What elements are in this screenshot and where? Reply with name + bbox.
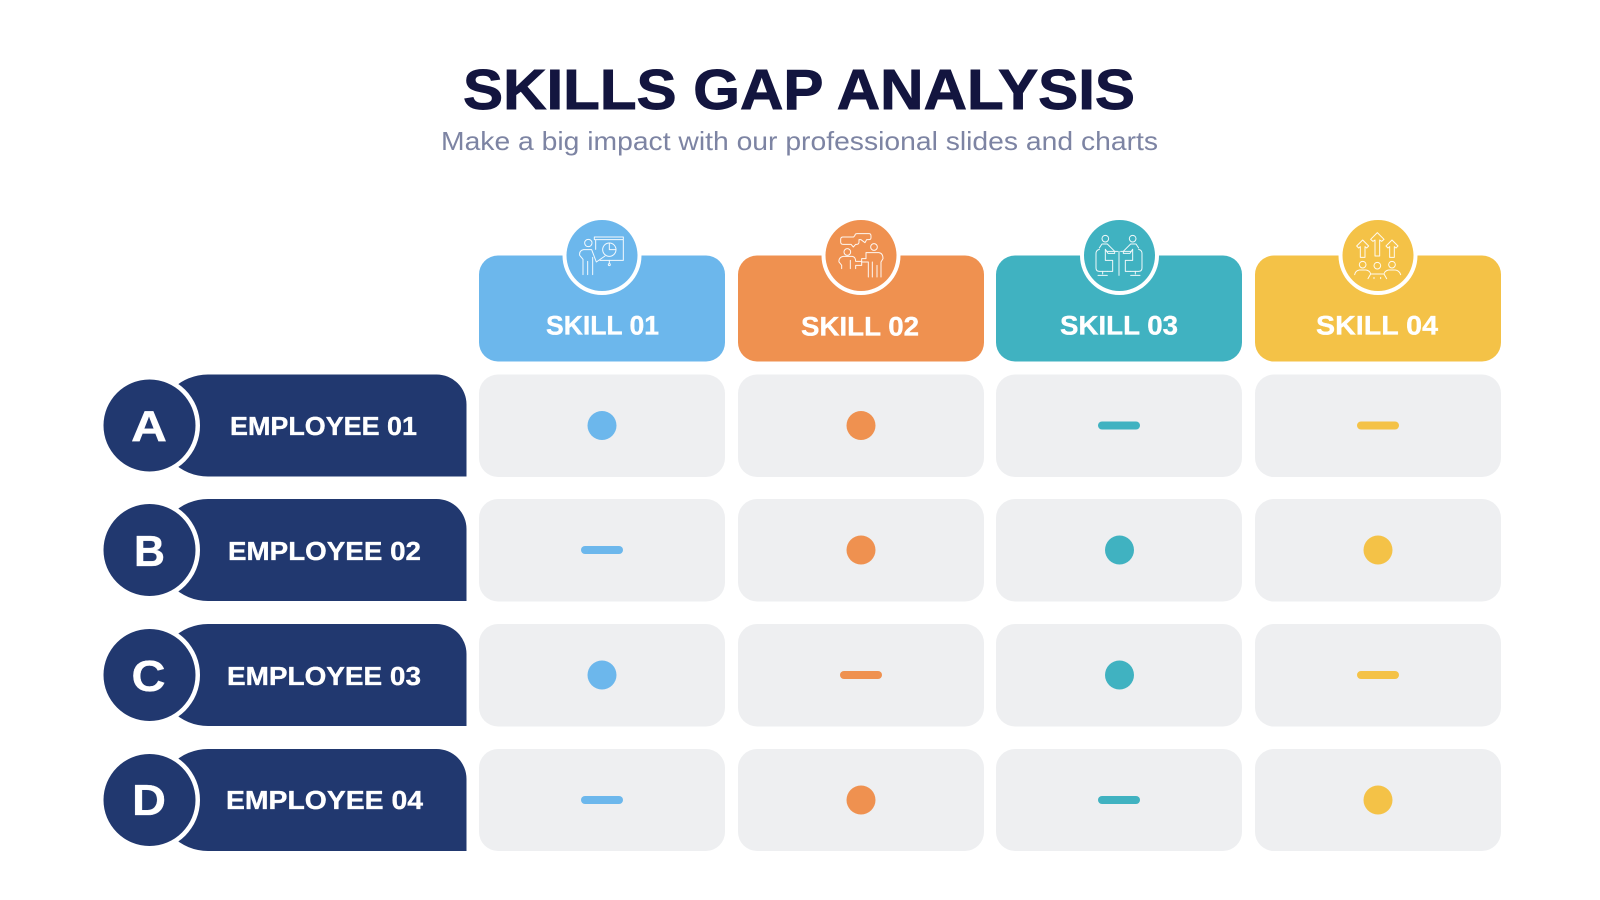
matrix row: Employee 02: [479, 499, 1501, 602]
label: Skill 01: SKILL 01: [546, 310, 659, 340]
row label: Employee 02: [99, 499, 466, 601]
row label: Employee 04: [99, 749, 466, 851]
label: Employee 03: EMPLOYEE 03: [227, 661, 421, 691]
row label: Employee 03: [99, 624, 466, 726]
label: Employee 02: EMPLOYEE 02: [228, 536, 421, 566]
label: Skill 04: SKILL 04: [1316, 310, 1438, 340]
letter D: D: [132, 776, 166, 825]
icon: presenter with pie chart board: [580, 237, 623, 275]
skill header: Skill 02: [738, 216, 984, 362]
subtitle: Make a big impact with our professional slides and charts: [441, 126, 1158, 156]
title: SKILLS GAP ANALYSIS: [463, 58, 1135, 122]
skill header: Skill 04: [1255, 216, 1501, 362]
icon: two people talking: [839, 234, 883, 277]
letter B: B: [134, 527, 165, 576]
skill header: Skill 01: [479, 216, 725, 362]
matrix row: Employee 04: [479, 749, 1501, 851]
label: Employee 01: EMPLOYEE 01: [230, 411, 417, 441]
matrix row: Employee 03: [479, 624, 1501, 726]
label: Skill 03: SKILL 03: [1060, 310, 1178, 340]
letter A: A: [131, 402, 167, 451]
letter C: C: [132, 652, 166, 701]
icon: team with growth arrows: [1355, 233, 1401, 279]
label: Skill 02: SKILL 02: [801, 312, 919, 342]
matrix row: Employee 01: [479, 374, 1501, 477]
label: Employee 04: EMPLOYEE 04: [226, 785, 424, 815]
icon: two people seated at table: [1096, 235, 1142, 275]
skill header: Skill 03: [996, 216, 1242, 362]
row label: Employee 01: [99, 374, 466, 476]
